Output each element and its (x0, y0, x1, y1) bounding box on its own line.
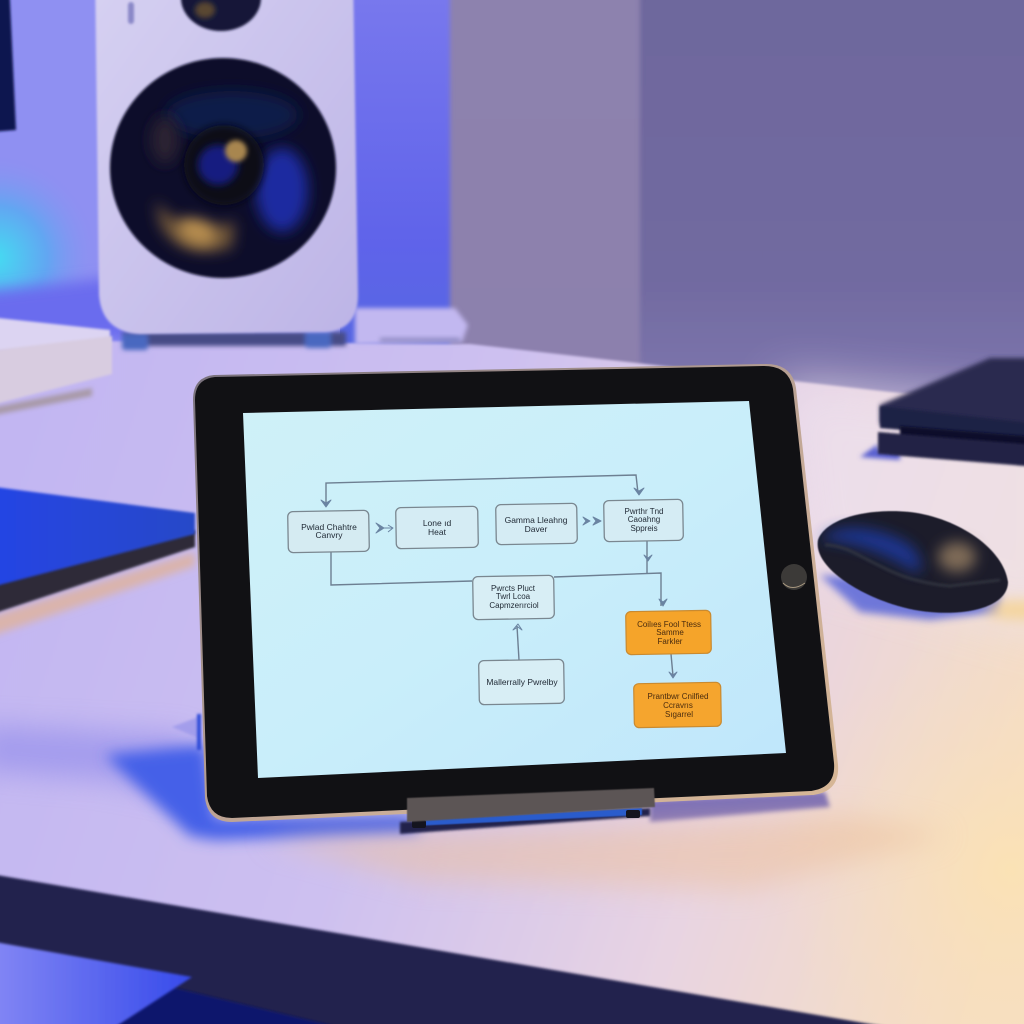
node: gamma: Gamma Lleahng (505, 515, 568, 525)
node: orange lower (634, 682, 721, 728)
speaker cabinet (95, 0, 358, 334)
node: orange upper (626, 610, 711, 655)
node: orange upper: Farkler (658, 637, 683, 646)
mouse blue highlight (822, 528, 921, 572)
node: top right: Caoahng (628, 515, 660, 524)
node: center (473, 575, 554, 620)
mouse body (818, 511, 1008, 613)
tablet shadow (0, 714, 830, 840)
mouse gold highlight (938, 542, 976, 572)
monitor corner (0, 0, 16, 133)
node: orange upper: Samme (656, 628, 684, 637)
node: orange lower: Prantbwr Cnilfied (648, 692, 708, 701)
under-desk blue glow (0, 934, 350, 1024)
warm reflection (260, 815, 950, 890)
background wall (0, 0, 1024, 450)
node: top right (604, 499, 683, 542)
tweeter (181, 0, 261, 31)
speaker feet (122, 332, 346, 350)
node: load: Heat (428, 527, 447, 537)
node: top left: Pwlad Chahtre (301, 522, 357, 532)
node: load (396, 506, 478, 549)
speaker stand shelf (355, 308, 468, 345)
node: top right: Sppreis (630, 524, 658, 533)
node: center: Twrl Lcoa (496, 592, 531, 601)
node: bottom: Mallerrally Pwrelby (486, 677, 558, 687)
mouse shadow (820, 575, 1000, 620)
left white box (0, 316, 112, 418)
arrowheads (321, 488, 677, 678)
node: center: Capmzerırciol (489, 601, 539, 610)
speaker (95, 0, 358, 350)
speaker dots (128, 2, 134, 24)
node: center: Pwrcts Pluct (491, 584, 536, 593)
tablet body (193, 364, 838, 822)
node: orange lower: Sıgarrel (665, 710, 693, 719)
home button (781, 564, 807, 590)
desk surface (0, 340, 1024, 1024)
node: gamma: Daver (525, 524, 547, 534)
left blue notebook (0, 485, 195, 640)
node: orange upper: Coilıes Fool Ttess (637, 620, 701, 629)
tablet (193, 364, 838, 822)
tablet stand (400, 788, 655, 834)
mouse (818, 511, 1024, 620)
node: load: Lone ıd (423, 518, 451, 528)
node: top right: Pwrthr Tnd (625, 507, 663, 516)
desk front edge (0, 867, 905, 1024)
node: top left (288, 510, 369, 553)
flowchart connectors (326, 475, 673, 676)
node: orange lower: Ccravrıs (663, 701, 693, 710)
screen (243, 401, 786, 778)
node: bottom (479, 659, 564, 705)
node: top left: Canvry (316, 530, 343, 540)
speaker woofer (110, 58, 336, 278)
right dark device stack (860, 358, 1024, 470)
node: gamma (496, 503, 577, 545)
